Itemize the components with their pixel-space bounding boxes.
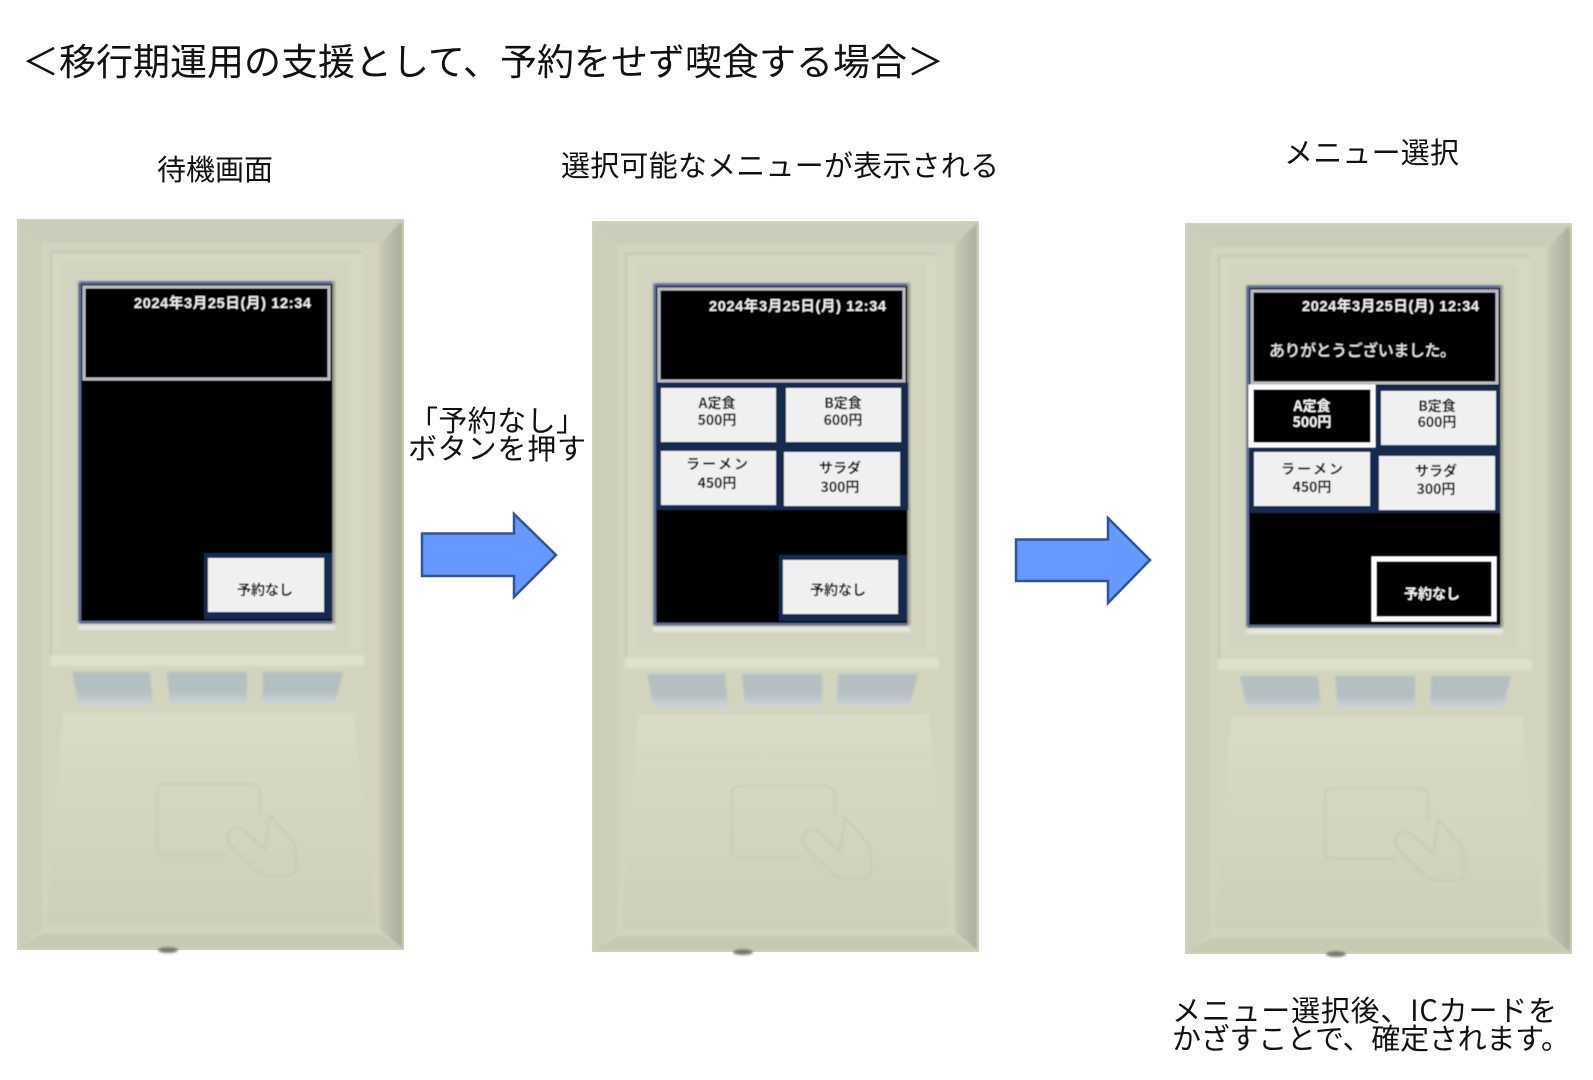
panel: kiosk menus displayed: [592, 221, 979, 955]
screen: 450円: [1293, 477, 1331, 497]
screen: 300円: [1417, 479, 1455, 499]
screen: 予約なし: [1404, 584, 1460, 604]
screen: ありがとうございました。: [1269, 337, 1456, 361]
screen: 600円: [1418, 412, 1456, 432]
screen: 2024年3月25日(月) 12:34: [709, 297, 886, 315]
heading: menu selection: メニュー選択: [1284, 130, 1459, 172]
screen: B定食: [824, 393, 862, 413]
screen: サラダ: [1415, 461, 1457, 481]
label: press no-reservation button: [408, 398, 586, 468]
note: confirm with IC card: メニュー選択後、ICカードを: [1172, 988, 1557, 1030]
screen: B定食: [1418, 396, 1456, 416]
arrow: step 2 to 3: [1016, 518, 1150, 603]
note: confirm with IC card: [1172, 988, 1570, 1058]
screen: 450円: [698, 473, 736, 493]
screen: [80, 283, 332, 622]
screen: 予約なし: [810, 580, 866, 600]
screen: ラーメン: [1281, 459, 1343, 479]
arrow: step 1 to 2: [422, 514, 556, 597]
screen: 2024年3月25日(月) 12:34: [1302, 297, 1479, 315]
screen: 2024年3月25日(月) 12:34: [134, 294, 311, 312]
screen: 500円: [698, 410, 736, 430]
screen: [1248, 287, 1500, 626]
title: ＜移行期運用の支援として、予約をせず喫食する場合＞: [22, 32, 944, 86]
screen: A定食: [698, 393, 735, 413]
screen: 500円: [1293, 412, 1331, 432]
screen: [655, 285, 908, 624]
screen: A定食: [1293, 396, 1330, 416]
label: press no-reservation button: ボタンを押す: [408, 426, 586, 468]
screen: 予約なし: [237, 580, 293, 600]
heading: selectable menu displayed: 選択可能なメニューが表示される: [561, 143, 999, 185]
note: confirm with IC card: かざすことで、確定されます。: [1172, 1016, 1570, 1058]
heading: standby screen: 待機画面: [157, 147, 273, 189]
panel: kiosk standby: [17, 219, 404, 953]
label: press no-reservation button: 「予約なし」: [409, 398, 585, 440]
screen: サラダ: [819, 458, 861, 478]
panel: kiosk menu selected: [1185, 223, 1572, 957]
screen: ラーメン: [686, 454, 748, 474]
screen: 300円: [821, 477, 859, 497]
screen: 600円: [824, 410, 862, 430]
